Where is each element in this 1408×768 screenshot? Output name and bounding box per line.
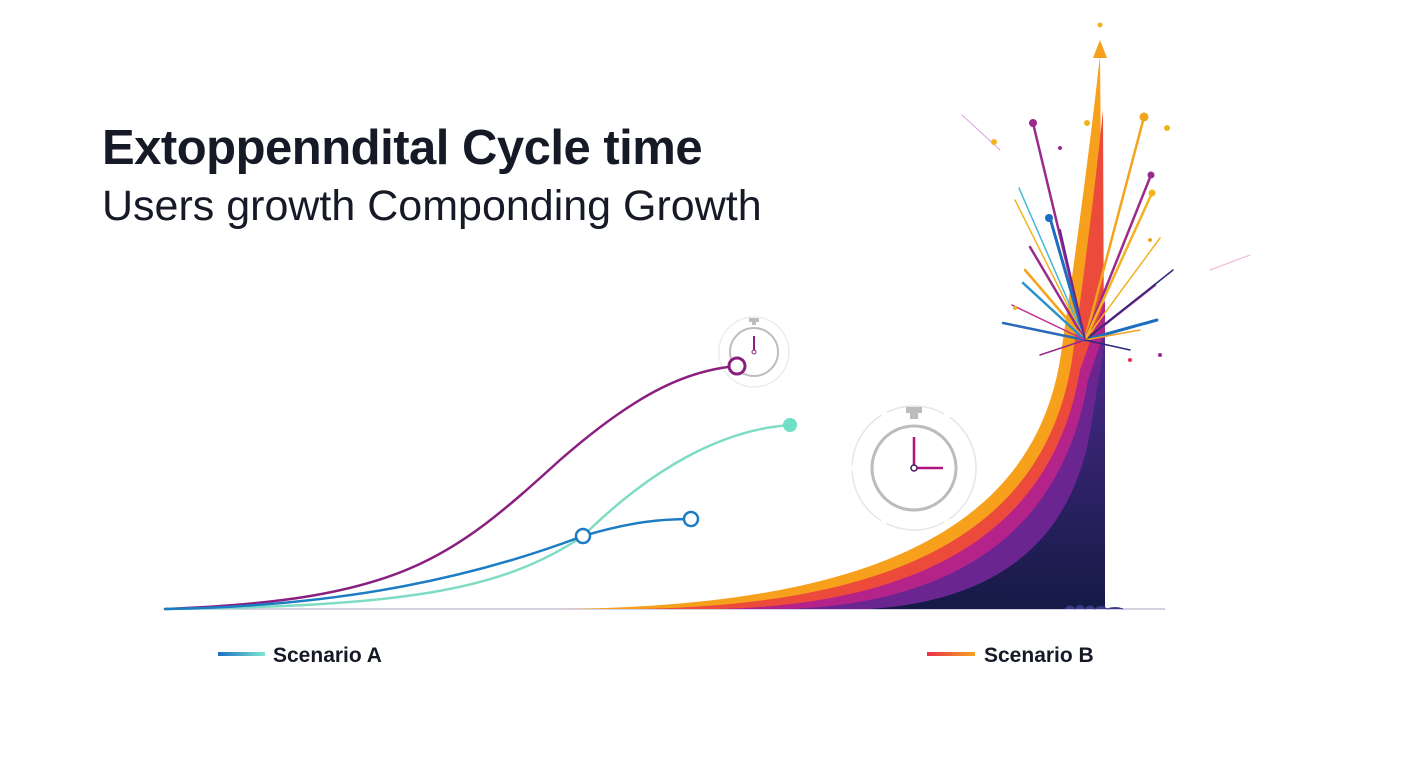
legend: scenario A: Scenario A bbox=[273, 644, 382, 667]
legend: scenario B bbox=[927, 644, 1094, 667]
squiggle at base bbox=[1065, 606, 1123, 609]
legend: scenario B: Scenario B bbox=[984, 644, 1094, 667]
icon: small clock bbox=[719, 317, 789, 387]
burst bbox=[962, 112, 1250, 362]
legend: scenario A bbox=[218, 644, 382, 667]
scenario A curves bbox=[165, 358, 797, 609]
title: Extoppenndital Cycle time bbox=[102, 121, 702, 175]
icon: large clock bbox=[852, 406, 976, 530]
subtitle: Users growth Componding Growth bbox=[102, 182, 762, 230]
baseline bbox=[165, 608, 1165, 610]
scenario B fan bbox=[560, 22, 1107, 609]
